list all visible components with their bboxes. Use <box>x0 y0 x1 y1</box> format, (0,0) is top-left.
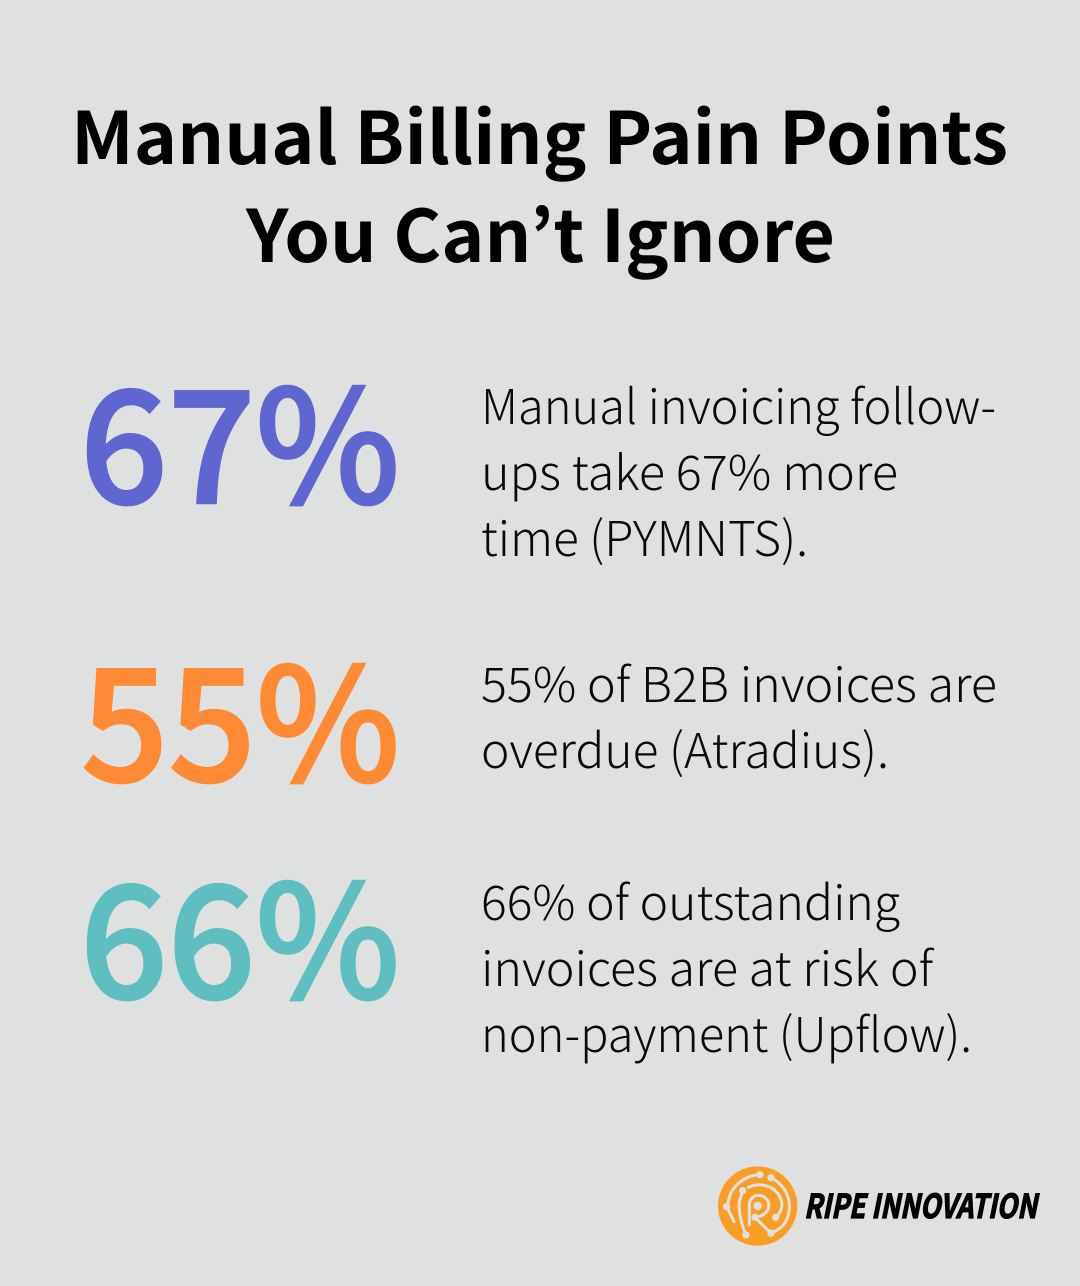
stat description: PYMNTS: time (PYMNTS). <box>481 500 808 570</box>
stat description: Atradius: 55% of B2B invoices are <box>481 646 997 716</box>
logo: Ripe Innovation <box>718 1166 1040 1246</box>
stat number: 66%: 66% <box>80 817 400 1043</box>
stat description: Atradius <box>481 646 997 782</box>
stat description: Upflow: invoices are at risk of <box>481 930 935 1000</box>
stat number: 55%: 55% <box>81 600 400 826</box>
stat description: PYMNTS: ups take 67% more <box>481 434 898 504</box>
icon: circuit R <box>718 1166 797 1246</box>
stat: 66% <box>80 817 972 1066</box>
stat description: PYMNTS: Manual invoicing follow- <box>481 368 996 438</box>
stat description: Upflow: 66% of outstanding <box>481 864 900 934</box>
stat description: Upflow <box>481 864 972 1066</box>
title: Manual Billing Pain Points <box>71 80 1008 185</box>
stat description: PYMNTS <box>481 368 996 570</box>
stat description: Upflow: non-payment (Upflow). <box>481 996 972 1066</box>
title <box>71 80 1008 283</box>
stat: 67% <box>80 322 996 570</box>
title: You Can’t Ignore <box>245 178 835 283</box>
stat number: 67%: 67% <box>80 322 400 548</box>
stat description: Atradius: overdue (Atradius). <box>481 712 889 782</box>
stat: 55% <box>81 600 997 826</box>
